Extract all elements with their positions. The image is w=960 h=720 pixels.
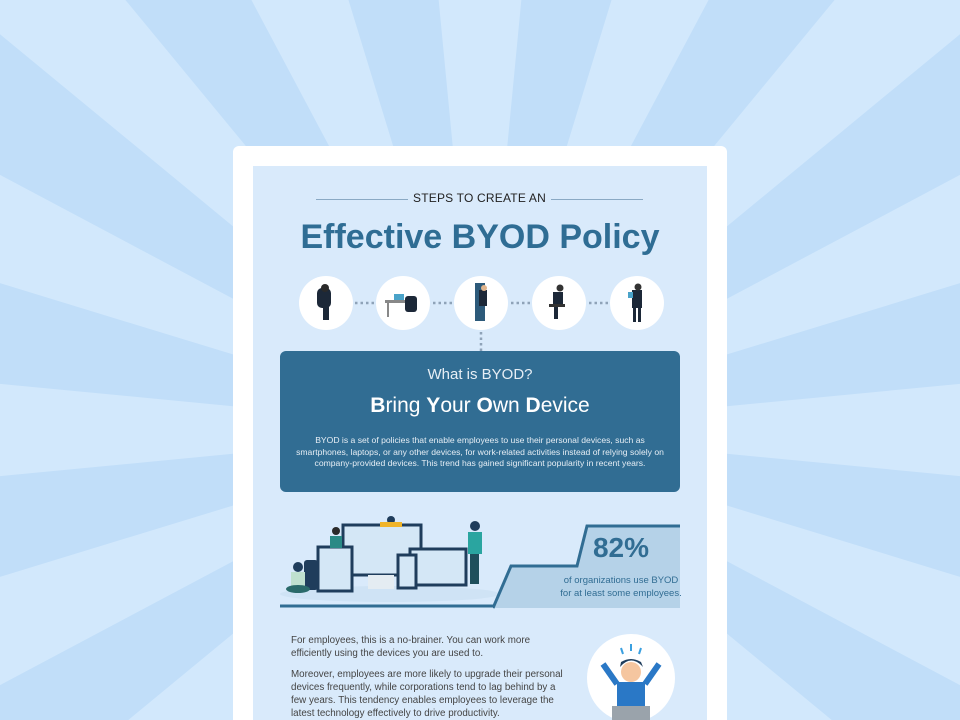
heading: What is BYOD? (427, 366, 533, 383)
stat text: of organizations use BYOD (564, 575, 678, 586)
icon: step 3 door (454, 276, 508, 330)
icon: step 4 laptop sit (532, 276, 586, 330)
text block: BYOD is a set of policies that enable employees to use their personal devices, such as smartphones, laptops, or any other devices, for work-related activities instead of relying solely on company-provided devices. This trend has gained significant popularity in recent years. (296, 435, 664, 468)
icon: step 1 person in chair (299, 276, 353, 330)
title: Effective BYOD Policy (300, 218, 660, 256)
text block: benefits: For employees, this is a no-brainer. You can work more efficiently using the devices you are used to. (291, 635, 530, 659)
panel: inner (253, 166, 707, 720)
stat callout (493, 524, 680, 609)
panel: what is BYOD (280, 351, 680, 492)
icon: happy employee (587, 634, 675, 720)
icon: step 2 desk (376, 276, 430, 330)
icon: step 5 standing (610, 276, 664, 330)
stat text: for at least some employees. (560, 588, 682, 599)
stat text (560, 575, 682, 599)
subtitle: STEPS TO CREATE AN (413, 191, 546, 205)
card (233, 146, 727, 720)
subheading: Bring Your Own Device (370, 394, 590, 417)
text block: benefits (291, 635, 563, 719)
illustration: devices (280, 516, 498, 608)
steps icons row (299, 276, 664, 351)
stat: 82%: 82% (593, 532, 649, 563)
text block: benefits: Moreover, employees are more likely to upgrade their personal devices frequently, while corporations tend to lag behind by a few years. This tendency enables employees to leverage the latest technology effectively to drive productivity. (291, 669, 563, 719)
